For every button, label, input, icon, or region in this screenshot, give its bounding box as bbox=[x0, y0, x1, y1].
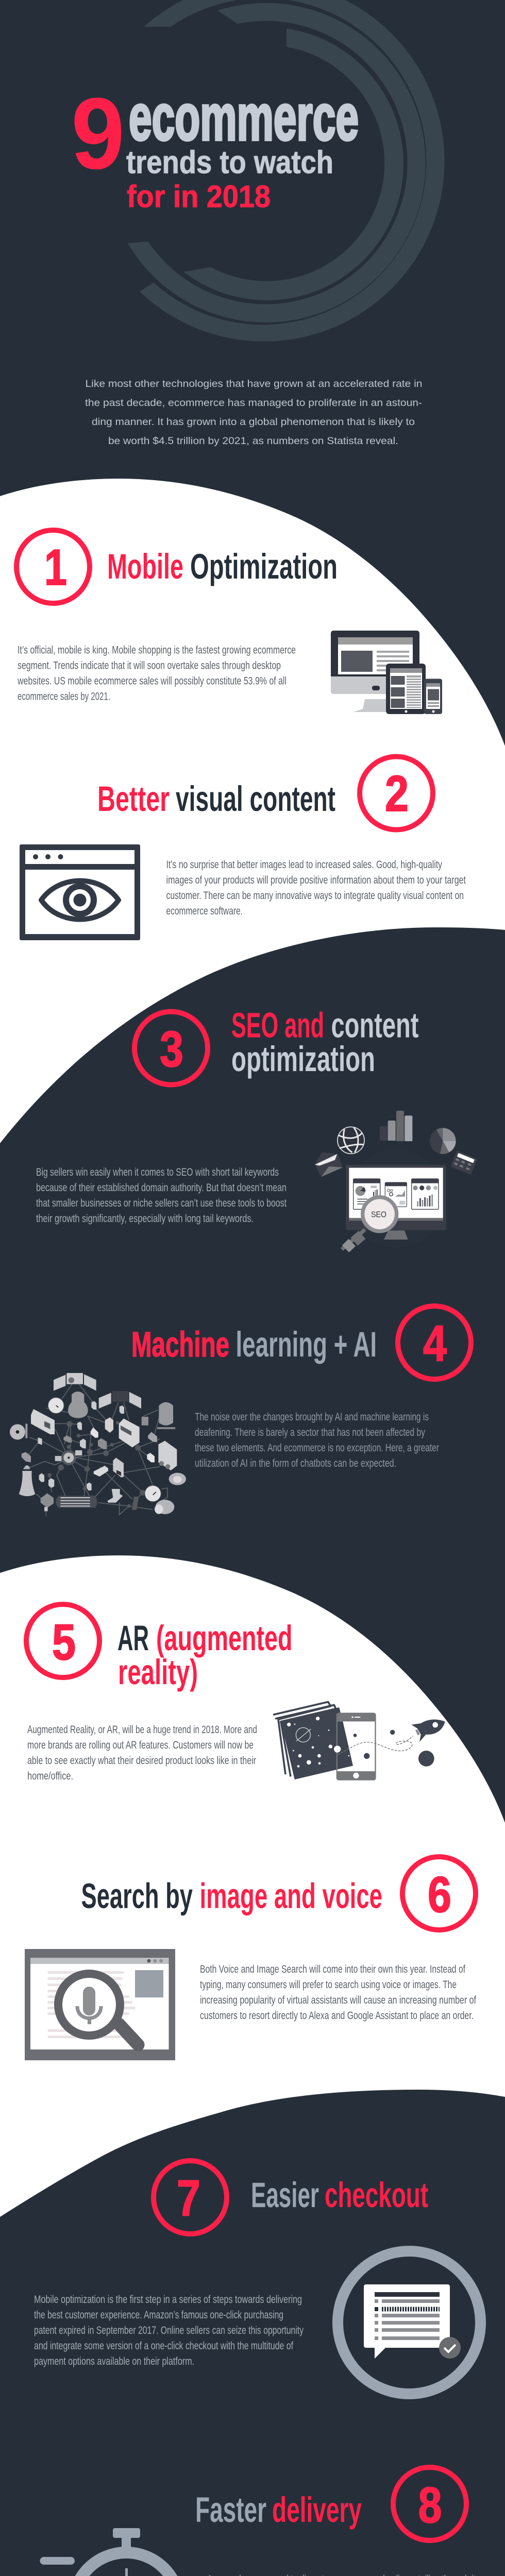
number badge 3: 3 bbox=[160, 1021, 183, 1077]
number badge 5: 5 bbox=[52, 1614, 76, 1670]
icon: seo dashboard: SEO bbox=[371, 1210, 386, 1219]
body text 3: because of their established domain authority. But that doesn’t mean bbox=[36, 1182, 287, 1194]
heading 4: learning + AI bbox=[236, 1325, 377, 1364]
heading 1: Optimization bbox=[190, 547, 338, 586]
icon: stopwatch with speed lines bbox=[14, 2528, 179, 2576]
intro paragraph: be worth $4.5 trillion by 2021, as numbers on Statista reveal. bbox=[108, 435, 398, 447]
white wave background: trends 1-2 bbox=[0, 479, 505, 1143]
title bbox=[71, 77, 359, 214]
heading 6 bbox=[81, 1876, 382, 1916]
body text 7: the best customer experience. Amazon’s famous one-click purchasing bbox=[34, 2309, 283, 2321]
title: for in 2018 bbox=[127, 179, 271, 214]
number badge 5 bbox=[26, 1604, 99, 1677]
body text 4 bbox=[195, 1411, 439, 1469]
heading 3 bbox=[231, 1006, 419, 1079]
body text 1: segment. Trends indicate that it will soon overtake sales through desktop bbox=[18, 659, 281, 672]
body text 4: deafening. There is barely a sector that has not been affected by bbox=[195, 1427, 425, 1438]
heading 4 bbox=[131, 1325, 377, 1364]
body text 2: ecommerce software. bbox=[166, 905, 243, 917]
panel: trend 8 faster delivery bbox=[14, 2467, 480, 2576]
number badge 6: 6 bbox=[428, 1866, 451, 1923]
white wave background: trends 5-6 bbox=[0, 1555, 505, 2217]
heading 3: optimization bbox=[231, 1039, 375, 1079]
number badge 1: 1 bbox=[44, 539, 67, 596]
number badge 2 bbox=[360, 756, 433, 829]
heading 7: Easier bbox=[251, 2175, 319, 2215]
body text 7: patent expired in September 2017. Online sellers can seize this opportunity bbox=[34, 2325, 304, 2336]
number badge 7: 7 bbox=[177, 2170, 200, 2226]
icon: seo dashboard bbox=[315, 1111, 477, 1249]
body text 1 bbox=[17, 644, 296, 703]
heading 7 bbox=[251, 2175, 428, 2215]
panel: trend 4 machine learning and ai bbox=[10, 1306, 471, 1516]
panel: trend 1 mobile optimization bbox=[16, 530, 442, 714]
body text 5: able to see exactly what their desired product looks like in their bbox=[27, 1755, 256, 1767]
heading 8 bbox=[195, 2490, 362, 2530]
body text 5 bbox=[27, 1724, 257, 1782]
body text 3: that smaller businesses or niche sellers can’t use these tools to boost bbox=[36, 1197, 287, 1209]
heading 6: image and voice bbox=[200, 1876, 382, 1916]
heading 5: (augmented bbox=[156, 1618, 293, 1658]
body text 4: utilization of AI in the form of chatbots can be expected. bbox=[195, 1458, 396, 1469]
intro paragraph: the past decade, ecommerce has managed to proliferate in an astoun- bbox=[85, 397, 422, 409]
title: ecommerce bbox=[129, 81, 359, 154]
icon: responsive devices bbox=[331, 631, 442, 714]
panel: trend 2 better visual content bbox=[20, 756, 466, 940]
heading 5: reality) bbox=[118, 1652, 198, 1692]
body text 3: Big sellers win easily when it comes to SEO with short tail keywords bbox=[36, 1166, 279, 1178]
heading 8: Faster bbox=[195, 2490, 266, 2530]
number badge 4: 4 bbox=[423, 1315, 447, 1371]
number badge 7 bbox=[154, 2161, 227, 2234]
intro paragraph bbox=[85, 378, 423, 447]
title: trends to watch bbox=[126, 145, 333, 180]
number badge 4 bbox=[398, 1306, 471, 1379]
number badge 3 bbox=[134, 1012, 208, 1085]
heading 2 bbox=[97, 779, 335, 819]
panel: trend 5 augmented reality bbox=[26, 1604, 445, 1782]
heading 7: checkout bbox=[325, 2175, 428, 2215]
body text 5: more brands are rolling out AR features. Customers will now be bbox=[27, 1739, 254, 1751]
heading 5: AR bbox=[117, 1618, 149, 1658]
body text 4: The noise over the changes brought by AI and machine learning is bbox=[195, 1411, 429, 1423]
body text 3 bbox=[36, 1166, 287, 1225]
body text 1: It’s official, mobile is king. Mobile shopping is the fastest growing ecommerce bbox=[18, 644, 296, 656]
body text 2 bbox=[166, 859, 466, 917]
panel: trend 6 search by image and voice bbox=[25, 1857, 476, 2060]
intro paragraph: ding manner. It has grown into a global phenomenon that is likely to bbox=[92, 416, 415, 428]
heading 6: Search by bbox=[81, 1876, 193, 1916]
body text 6 bbox=[200, 1963, 476, 2022]
heading 3: content bbox=[331, 1006, 419, 1045]
body text 7 bbox=[34, 2294, 304, 2367]
number badge 1 bbox=[16, 530, 90, 603]
heading 1: Mobile bbox=[107, 547, 183, 586]
number badge 8: 8 bbox=[418, 2477, 442, 2533]
icon: connected industrial devices network bbox=[10, 1373, 186, 1516]
body text 5: home/office. bbox=[27, 1770, 73, 1782]
number badge 8 bbox=[393, 2467, 466, 2540]
heading 3: SEO and bbox=[231, 1006, 324, 1045]
icon: checkout list speech bubble in ring bbox=[338, 2251, 480, 2394]
body text 5: Augmented Reality, or AR, will be a huge trend in 2018. More and bbox=[27, 1724, 257, 1736]
panel: trend 3 seo and content optimization bbox=[36, 1006, 477, 1249]
icon: augmented reality phone, cards and rocket bbox=[273, 1702, 445, 1781]
body text 7: and integrate some version of a one-click checkout with the multitude of bbox=[34, 2340, 293, 2352]
panel: trend 7 easier checkout bbox=[34, 2161, 480, 2394]
body text 7: payment options available on their platform. bbox=[34, 2355, 194, 2367]
heading 5 bbox=[117, 1618, 293, 1692]
number badge 6 bbox=[402, 1857, 476, 1930]
title: 9 bbox=[71, 77, 125, 190]
decorative concentric ring graphic bbox=[128, 0, 445, 342]
body text 1: websites. US mobile ecommerce sales will possibly constitute 53.9% of all bbox=[17, 675, 287, 687]
heading 2: visual content bbox=[176, 779, 335, 819]
body text 3: their growth significantly, especially with long tail keywords. bbox=[36, 1213, 254, 1225]
body text 7: Mobile optimization is the first step in a series of steps towards delivering bbox=[34, 2294, 302, 2306]
icon: browser window with eye bbox=[20, 844, 140, 940]
heading 8: delivery bbox=[272, 2490, 362, 2530]
heading 2: Better bbox=[97, 779, 170, 819]
intro paragraph: Like most other technologies that have grown at an accelerated rate in bbox=[86, 378, 423, 389]
number badge 2: 2 bbox=[385, 765, 409, 822]
heading 1 bbox=[107, 547, 338, 586]
icon: voice search magnifier on browser bbox=[25, 1949, 175, 2060]
heading 4: Machine bbox=[131, 1325, 229, 1364]
body text 1: ecommerce sales by 2021. bbox=[18, 690, 110, 703]
